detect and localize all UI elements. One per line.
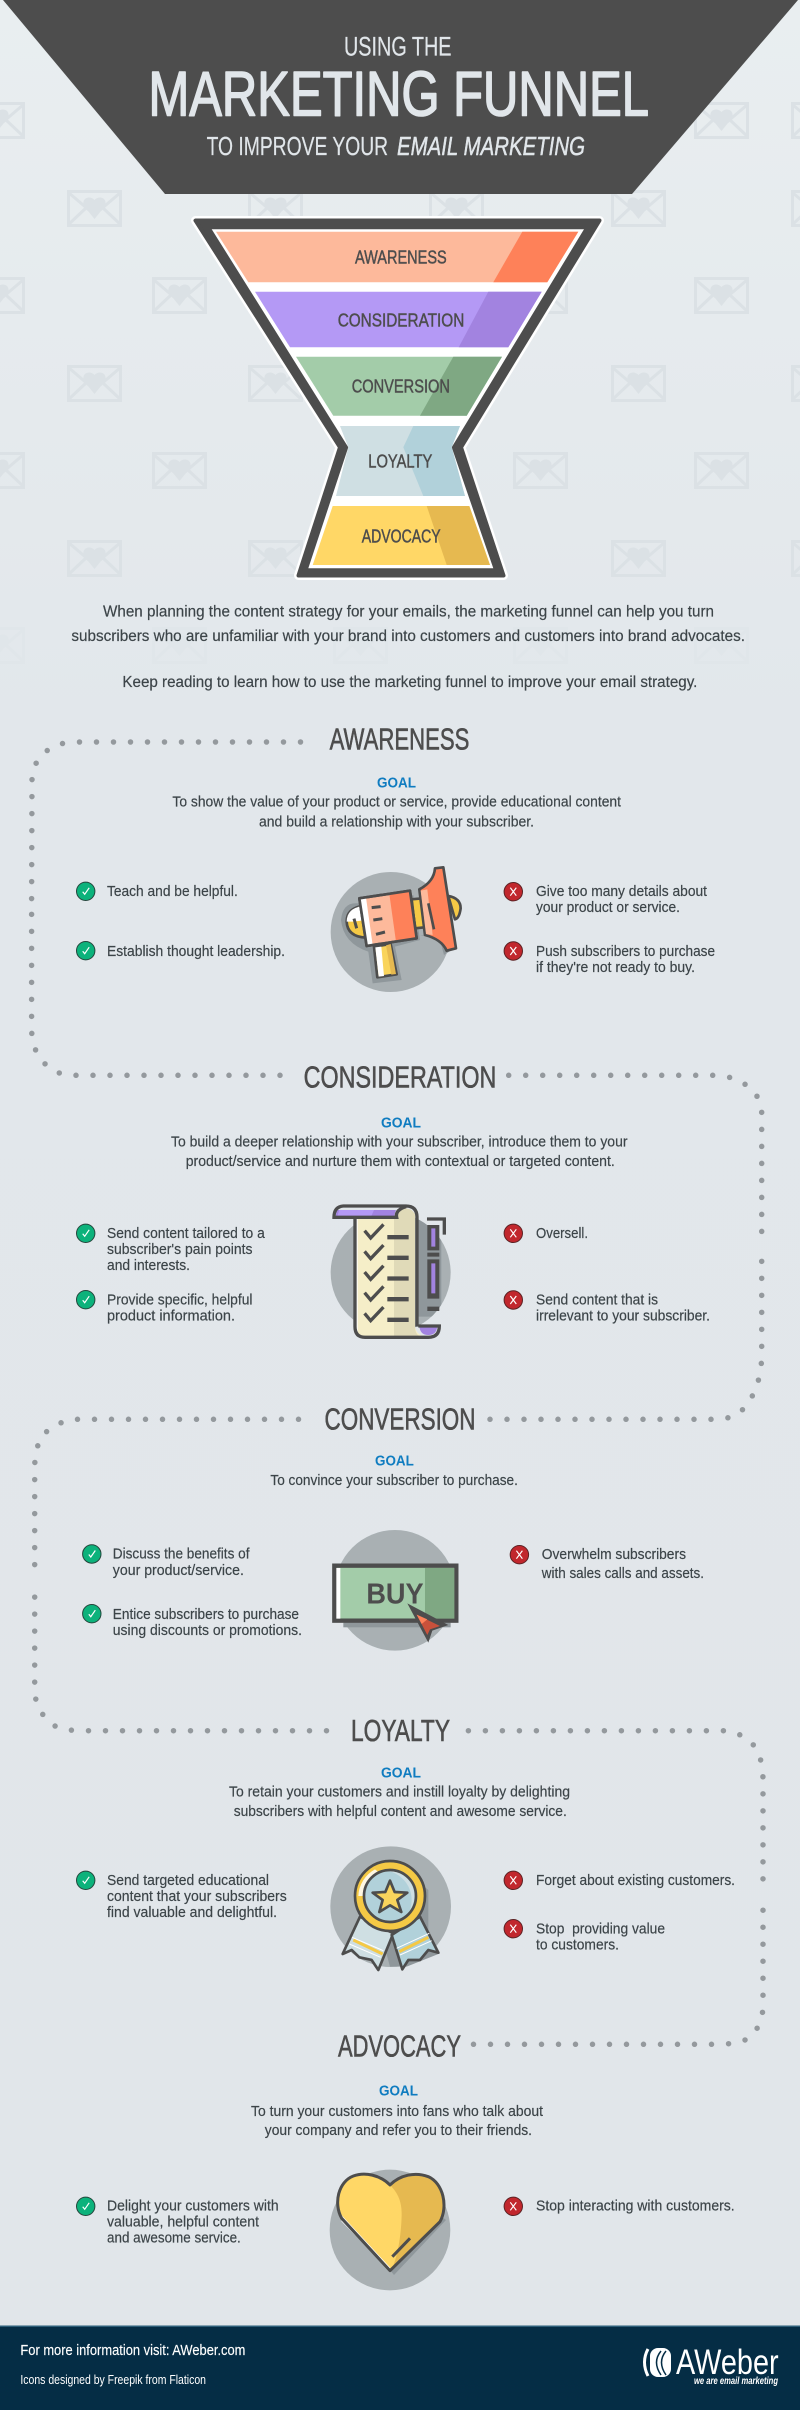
don't item: Overwhelm subscribers: [542, 1547, 686, 1563]
do item: content that your subscribers: [107, 1889, 287, 1905]
don't item: Push subscribers to purchase: [536, 944, 715, 960]
don't item: with sales calls and assets.: [541, 1566, 704, 1582]
do item: and awesome service.: [107, 2231, 241, 2247]
goal text: and build a relationship with your subscriber.: [259, 815, 534, 831]
do item: Send targeted educational: [107, 1873, 269, 1889]
funnel band: advocacy: [313, 506, 490, 565]
do item: Send content tailored to a: [107, 1226, 266, 1242]
don't item: if they're not ready to buy.: [536, 960, 695, 976]
don't item: your product or service.: [536, 900, 680, 916]
do item: [76, 1224, 266, 1274]
icon: buy button with cursor: BUY: [366, 1578, 424, 1610]
goal text: product/service and nurture them with contextual or targeted content.: [186, 1154, 615, 1170]
title: MARKETING FUNNEL: [148, 60, 649, 130]
goal text: To convince your subscriber to purchase.: [270, 1473, 518, 1489]
goal text: [229, 1785, 570, 1820]
heading: advocacy: ADVOCACY: [338, 2030, 461, 2064]
funnel band: advocacy: ADVOCACY: [362, 526, 441, 547]
goal text: [171, 1135, 628, 1170]
goal text: To retain your customers and instill loyalty by delighting: [229, 1785, 570, 1801]
do item: Establish thought leadership.: [107, 944, 285, 960]
do item: and interests.: [107, 1258, 190, 1274]
goal text: [172, 795, 621, 831]
goal text: To turn your customers into fans who talk about: [251, 2104, 543, 2120]
heading: consideration: CONSIDERATION: [304, 1060, 496, 1094]
title: [148, 32, 649, 161]
do item: [83, 1545, 250, 1579]
section: awareness: [76, 722, 715, 992]
icon: checklist and pen: [331, 1206, 451, 1337]
funnel band: loyalty: [336, 426, 465, 496]
don't item: [504, 942, 715, 976]
heading: loyalty: LOYALTY: [351, 1714, 450, 1748]
goal text: To show the value of your product or service, provide educational content: [172, 795, 621, 811]
title: EMAIL MARKETING: [397, 131, 585, 161]
don't item: [504, 1920, 665, 1953]
goal label: GOAL: [375, 1454, 414, 1470]
intro text: [71, 604, 745, 691]
funnel band: awareness: AWARENESS: [355, 246, 447, 268]
do item: [76, 2197, 279, 2247]
don't item: Send content that is: [536, 1293, 658, 1309]
do item: product information.: [107, 1309, 235, 1325]
logo: AWeber: AWeber: [676, 2343, 779, 2382]
do item: Provide specific, helpful: [107, 1293, 252, 1309]
title: USING THE: [344, 32, 452, 62]
goal label: GOAL: [379, 2084, 418, 2100]
don't item: [504, 1291, 710, 1325]
funnel band: conversion: [296, 357, 502, 416]
intro text: When planning the content strategy for your emails, the marketing funnel can help you turn: [103, 604, 714, 621]
logo: AWeber: [644, 2343, 779, 2387]
footer: [0, 2326, 800, 2410]
icon: award ribbon: [330, 1846, 451, 1970]
don't item: Stop interacting with customers.: [536, 2199, 735, 2215]
section: conversion: [83, 1402, 704, 1651]
do item: subscriber's pain points: [107, 1242, 252, 1258]
don't item: [504, 882, 707, 916]
goal label: GOAL: [377, 776, 416, 792]
heading: awareness: AWARENESS: [330, 722, 469, 756]
funnel band: conversion: CONVERSION: [352, 376, 450, 397]
do item: Delight your customers with: [107, 2199, 279, 2215]
do item: Teach and be helpful.: [107, 884, 238, 900]
funnel band: awareness: [216, 232, 578, 282]
funnel band: consideration: CONSIDERATION: [338, 310, 464, 331]
goal text: To build a deeper relationship with your subscriber, introduce them to your: [171, 1135, 628, 1151]
do item: [76, 882, 238, 900]
funnel diagram: [196, 220, 600, 576]
title: TO IMPROVE YOUR: [207, 131, 388, 161]
don't item: Oversell.: [536, 1226, 588, 1242]
don't item: [504, 1224, 588, 1243]
intro text: Keep reading to learn how to use the marketing funnel to improve your email strategy.: [122, 674, 697, 691]
do item: Discuss the benefits of: [113, 1547, 250, 1563]
goal text: [251, 2104, 543, 2139]
do item: find valuable and delightful.: [107, 1905, 277, 1921]
don't item: irrelevant to your subscriber.: [536, 1309, 710, 1325]
icon: heart: [330, 2170, 450, 2290]
header banner: [3, 0, 798, 194]
section: consideration: [76, 1060, 710, 1337]
heading: conversion: CONVERSION: [324, 1402, 476, 1436]
icon: megaphone: [331, 867, 461, 992]
goal text: your company and refer you to their friends.: [265, 2123, 532, 2139]
goal text: subscribers with helpful content and awesome service.: [234, 1804, 567, 1820]
don't item: Stop providing value: [536, 1921, 665, 1937]
do item: [76, 1290, 252, 1325]
don't item: Give too many details about: [536, 884, 707, 900]
do item: using discounts or promotions.: [113, 1623, 302, 1639]
goal label: GOAL: [381, 1766, 421, 1782]
section: advocacy: [76, 2030, 735, 2290]
don't item: [510, 1546, 704, 1582]
icon: buy button with cursor: [334, 1530, 456, 1651]
don't item: Forget about existing customers.: [536, 1873, 735, 1889]
footer link text: For more information visit: AWeber.com: [20, 2342, 245, 2359]
funnel band: consideration: [255, 292, 542, 347]
dotted connector path: [32, 742, 763, 2044]
do item: valuable, helpful content: [107, 2215, 259, 2231]
do item: [83, 1604, 302, 1639]
goal label: GOAL: [381, 1116, 421, 1132]
intro text: subscribers who are unfamiliar with your brand into customers and customers into brand advocates.: [71, 628, 745, 645]
do item: Entice subscribers to purchase: [113, 1607, 299, 1623]
do item: [76, 1871, 287, 1921]
section: loyalty: [76, 1714, 735, 1970]
funnel band: loyalty: LOYALTY: [368, 451, 432, 472]
don't item: to customers.: [536, 1937, 619, 1953]
icon credit: Icons designed by Freepik from Flaticon: [20, 2372, 206, 2387]
do item: your product/service.: [113, 1563, 244, 1579]
